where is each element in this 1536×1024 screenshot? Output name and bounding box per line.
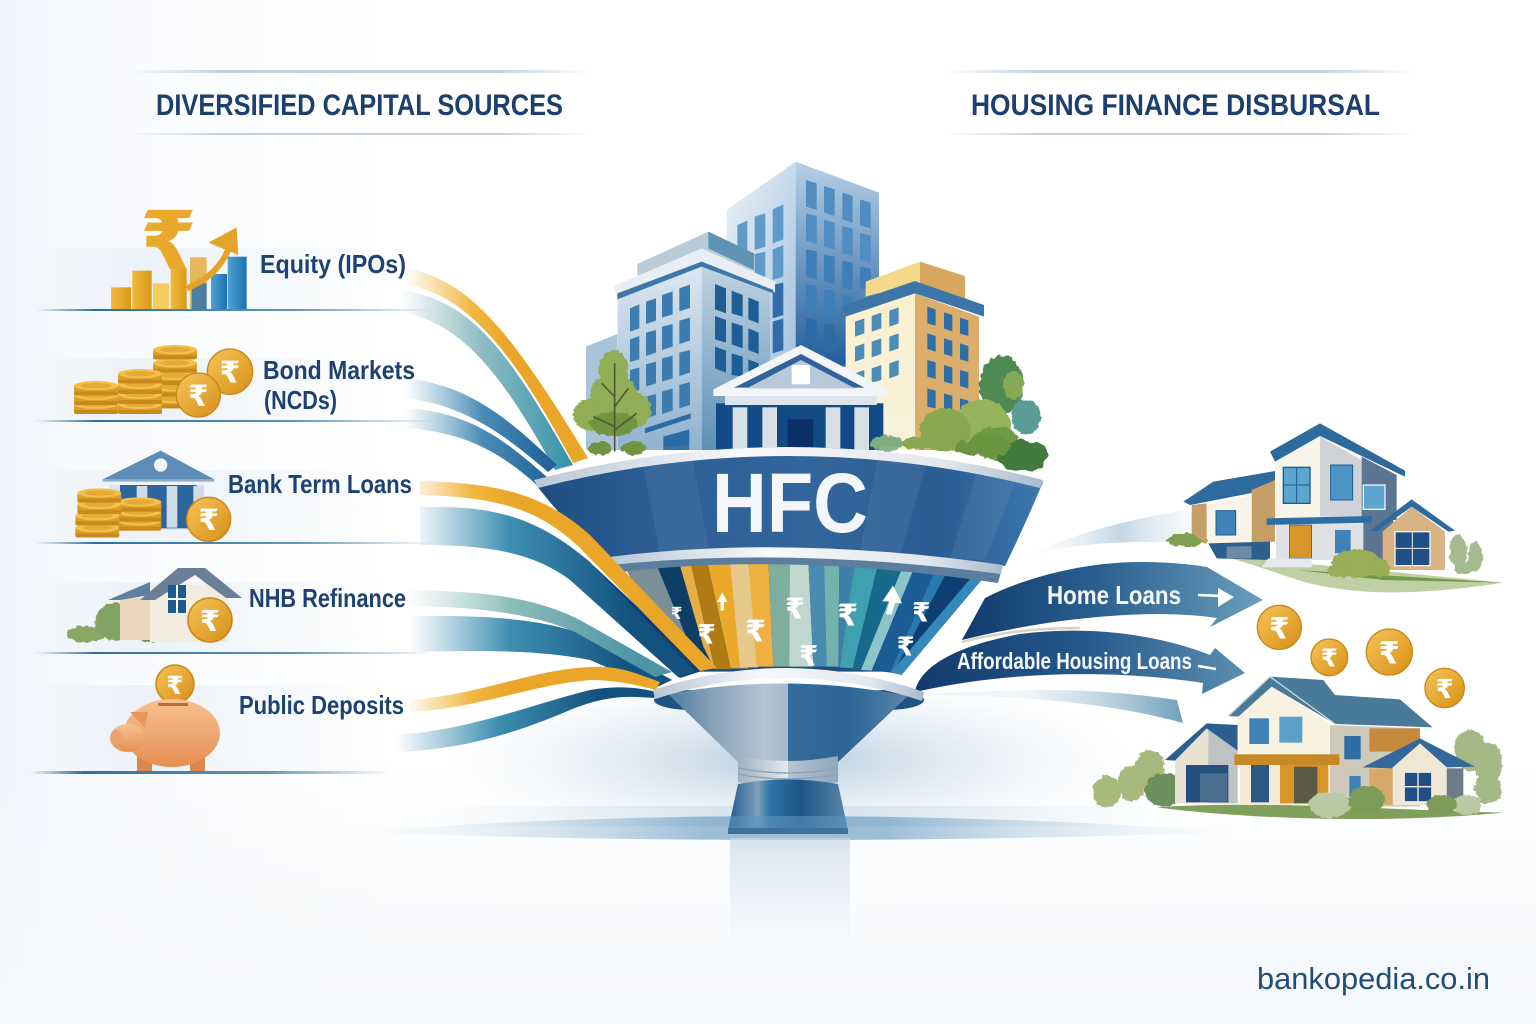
streams behind funnel: equity and bond flows xyxy=(400,268,588,486)
arrow: home loans: Home Loans xyxy=(1047,580,1181,610)
icon: rising bars with rupee: ₹ xyxy=(141,194,196,287)
arrow: home loans xyxy=(962,562,1263,640)
label: equity: Equity (IPOs) xyxy=(260,249,406,279)
rupee symbols: ₹ xyxy=(697,619,716,650)
upper house xyxy=(1090,423,1503,598)
source: NHB refinance xyxy=(66,568,406,642)
rupee symbols: ₹ xyxy=(671,604,682,623)
rupee symbols: ₹ xyxy=(837,599,858,634)
label: bank term loans: Bank Term Loans xyxy=(228,469,412,499)
houses group xyxy=(1090,423,1503,819)
source shelves xyxy=(30,248,435,774)
icon: bank with coins xyxy=(75,451,231,541)
rupee symbols: ₹ xyxy=(785,591,805,625)
icon: coin stacks: ₹ xyxy=(188,379,209,413)
coins: ₹ xyxy=(1379,636,1400,671)
source: equity xyxy=(111,194,406,309)
icon: house with coin xyxy=(66,568,242,642)
rupee symbols: ₹ xyxy=(799,639,818,672)
right arrows: fade stream xyxy=(920,510,1215,723)
rupee symbols: ₹ xyxy=(745,615,766,650)
arrow: affordable housing loans: Affordable Housing Loans xyxy=(957,648,1192,674)
funnel lower cone xyxy=(653,668,924,834)
left tree xyxy=(573,350,652,455)
icon: city buildings xyxy=(573,162,1041,460)
upward arrows xyxy=(717,586,902,615)
foliage over funnel rim xyxy=(955,438,1048,471)
coins: ₹ xyxy=(1321,644,1338,673)
icon: coin stacks xyxy=(74,345,253,417)
icon: coin stacks: ₹ xyxy=(220,356,240,391)
icon: house with coin: ₹ xyxy=(200,604,220,638)
icon: piggy bank with coin xyxy=(110,665,220,771)
icon: bank with coins: ₹ xyxy=(198,503,219,537)
rupee symbols: ₹ xyxy=(912,598,931,629)
heading: diversified capital sources: DIVERSIFIED CAPITAL SOURCES xyxy=(156,89,563,122)
label: bond markets: (NCDs) xyxy=(264,385,337,415)
icon: piggy bank with coin: ₹ xyxy=(166,671,184,700)
middle building xyxy=(614,232,775,450)
source: public deposits xyxy=(110,665,404,771)
heading: diversified capital sources xyxy=(130,70,590,135)
coins xyxy=(1257,605,1464,708)
right trees xyxy=(870,356,1041,460)
label: bond markets: Bond Markets xyxy=(263,355,415,385)
icon: rising bars with rupee xyxy=(111,194,247,309)
funnel inner stripes with rupee symbols xyxy=(620,560,985,675)
bank building xyxy=(713,345,887,450)
rupee symbols xyxy=(671,591,931,672)
yellow building xyxy=(842,262,984,450)
coins: ₹ xyxy=(1269,611,1290,645)
lower house xyxy=(1093,677,1503,819)
funnel upper bowl xyxy=(534,445,1043,566)
rupee symbols: ₹ xyxy=(897,633,915,663)
source: bond markets xyxy=(74,345,415,417)
label: NHB refinance: NHB Refinance xyxy=(249,583,406,613)
source: bank term loans xyxy=(75,451,412,541)
back tower xyxy=(727,162,879,367)
brand url: bankopedia.co.in xyxy=(1257,961,1490,996)
label: public deposits: Public Deposits xyxy=(239,690,404,720)
heading: housing finance disbursal: HOUSING FINANCE DISBURSAL xyxy=(971,89,1380,122)
streams into funnel: bank, NHB, deposits xyxy=(395,481,717,752)
ground shadow and reflection xyxy=(350,816,1240,948)
coins: ₹ xyxy=(1436,675,1454,705)
heading: housing finance disbursal xyxy=(945,70,1415,135)
funnel mid rim xyxy=(610,547,1003,583)
arrow: affordable housing loans xyxy=(915,628,1245,694)
HFC title: HFC xyxy=(712,456,868,550)
small left block xyxy=(586,334,617,450)
